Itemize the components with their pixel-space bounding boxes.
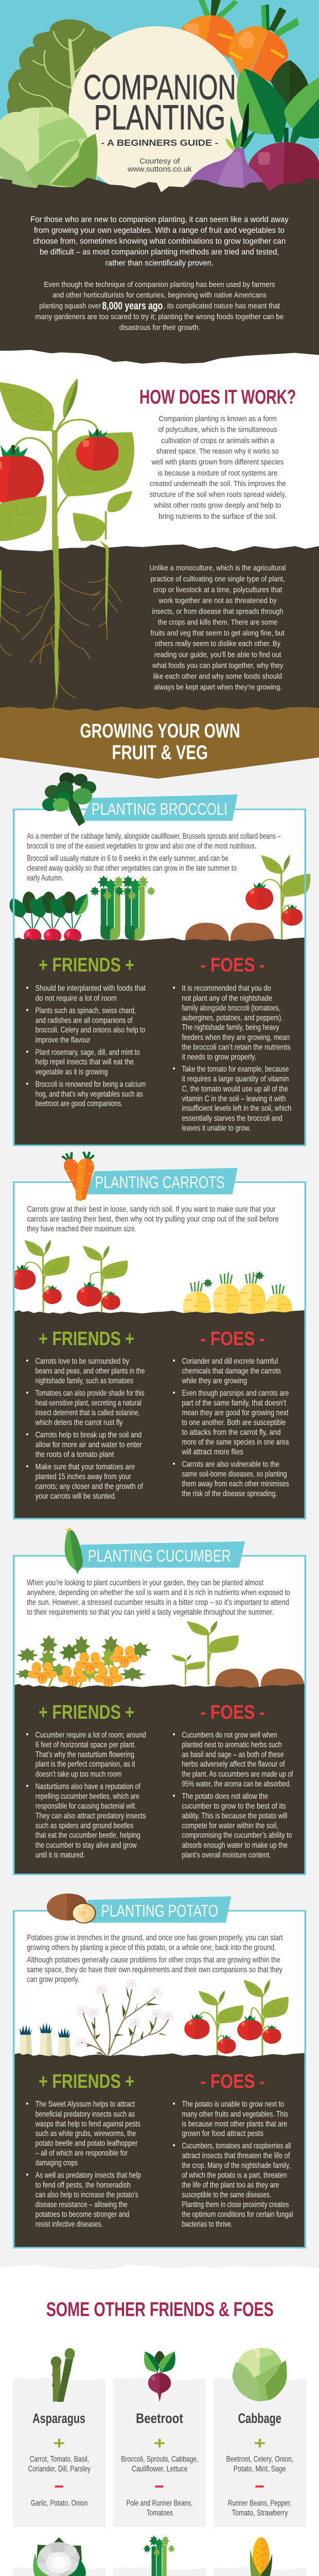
courtesy line: Courtesy of — [139, 157, 180, 165]
friends list: Cucumber require a lot of room; around — [36, 1730, 146, 1739]
foes list — [173, 1730, 293, 1859]
foes list: to attacks from the carrot fly, and — [182, 1427, 281, 1437]
friends list: potatoes to become stronger and — [36, 2209, 129, 2219]
icon: corn — [250, 2537, 272, 2576]
friends list: beans and peas, and other plants in the — [36, 1366, 145, 1376]
friends list: can also help to increase the potato’s — [36, 2190, 138, 2199]
history text: disastrous for their growth. — [119, 324, 200, 332]
illustration: sweet alyssum — [76, 1980, 173, 2056]
foes list: It is recommended that you do — [182, 984, 271, 993]
card: asparagus: Carrot, Tomato, Basil, — [30, 2454, 89, 2464]
banner: planting cucumber — [78, 1541, 245, 1568]
card: asparagus: Coriander, Dill, Parsley — [28, 2464, 91, 2473]
card: beetroot: – — [155, 2479, 164, 2493]
foes list: Carrots are also vulnerable to the — [182, 1459, 279, 1469]
text: polyculture: bring nutrients to the surface of the soil. — [158, 512, 277, 520]
icon: potato — [47, 1893, 96, 1924]
history text: 8,000 years ago — [102, 299, 163, 312]
friends list: the roots of a tomato plant — [36, 1449, 114, 1459]
friends list: Carrots love to be surrounded by — [36, 1356, 129, 1365]
card: asparagus: Asparagus — [32, 2411, 85, 2427]
title: PLANTING — [94, 98, 225, 137]
friends list: 6 feet of horizontal space per plant. — [36, 1740, 136, 1749]
friends list — [26, 1730, 146, 1859]
friends list: resist infective diseases. — [36, 2219, 103, 2229]
foes heading: - FOES - — [200, 1701, 265, 1723]
row: cards 1 — [13, 2348, 306, 2527]
friends list: doesn’t take up too much room — [36, 1769, 121, 1778]
foes list: compete for water within the soil, — [182, 1821, 278, 1830]
friends list: Carrots help to break up the soil and — [36, 1430, 141, 1439]
illustration: parsnips — [183, 1272, 292, 1326]
friends list: carrots; any closer and the growth of — [36, 1481, 143, 1490]
grey background — [0, 742, 319, 2269]
icon: carrots — [62, 1152, 94, 1201]
icon: front carrot — [228, 4, 299, 83]
card: cabbage — [214, 2348, 306, 2527]
banner: planting cucumber: PLANTING CUCUMBER — [88, 1547, 231, 1565]
friends heading: + FRIENDS + — [39, 1328, 134, 1349]
intro text: cucumber — [27, 1578, 290, 1617]
friends list: damaging crops — [36, 2158, 78, 2167]
foes list: grown for food attract pests — [182, 2128, 263, 2138]
illustration: nasturtiums — [14, 1635, 151, 1688]
card: asparagus: – — [55, 2479, 63, 2493]
text: monoculture — [150, 564, 286, 691]
foes list: leaves it unable to grow. — [182, 1123, 251, 1132]
foes heading: - FOES - — [200, 1328, 265, 1349]
foes list: while they are growing — [182, 1376, 247, 1385]
friends list: hog, and that’s why vegetables such as — [36, 1089, 143, 1098]
history text: planting squash over — [39, 302, 101, 310]
card: beetroot: Broccoli, Sprouts, Cabbage, — [121, 2454, 199, 2464]
friends list: such as white grubs, wireworms, the — [36, 2128, 136, 2138]
illustration: tomato plant — [245, 855, 310, 939]
friends heading: + FRIENDS + — [39, 954, 134, 976]
icon: celery — [143, 2535, 175, 2576]
intro text: carrots: they have reached their maximum size. — [27, 1224, 136, 1233]
icon: beetroot — [144, 2351, 175, 2402]
card: beetroot: Beetroot — [136, 2411, 183, 2427]
friends list: potato beetle and potato leafhopper — [36, 2139, 137, 2148]
friends list: your carrots will be stunted. — [36, 1491, 116, 1501]
icon: cabbage — [0, 107, 98, 192]
card: corn — [214, 2537, 306, 2576]
intro text: potato — [27, 1933, 283, 1984]
friends list: do not require a lot of room — [36, 993, 117, 1003]
friends list: disease resistance – allowing the — [36, 2199, 128, 2209]
friends list — [26, 984, 146, 1108]
friends list: heat-sensitive plant, secreting a natural — [36, 1398, 141, 1408]
panel: potato — [14, 1893, 305, 2248]
foes list — [173, 2099, 293, 2229]
card: asparagus: + — [54, 2433, 65, 2452]
illustration: tomato plants — [184, 1979, 289, 2056]
illustration: tomato seedlings and potatoes — [171, 1621, 305, 1688]
foes list: not plant any of the nightshade — [182, 993, 272, 1003]
friends list: nightshade family, such as tomatoes — [36, 1376, 133, 1385]
banner: planting carrots — [85, 1168, 238, 1194]
icon: broccoli — [42, 772, 96, 826]
friends list: As well as predatory insects that help — [36, 2170, 141, 2179]
intro text: broccoli — [27, 831, 281, 883]
friends list: Make sure that your tomatoes are — [36, 1462, 135, 1471]
subtitle: - A BEGINNERS GUIDE - — [101, 138, 218, 148]
card: cabbage: Potato, Mint, Sage — [234, 2464, 286, 2473]
card: cabbage: Tomato, Strawberry — [232, 2508, 288, 2517]
icon: red onion — [187, 103, 263, 192]
illustration: radishes — [10, 891, 88, 943]
illustration: celery — [90, 875, 156, 940]
card: beetroot: Tomatoes — [147, 2508, 173, 2517]
text: polyculture: Companion planting is known as a form — [158, 415, 277, 423]
card: beetroot — [113, 2351, 206, 2527]
friends list — [26, 1356, 145, 1501]
foes list: plant’s overall moisture content. — [182, 1850, 271, 1859]
foes list: will attract more flies — [182, 1447, 243, 1456]
intro text: broccoli: early Autumn. — [27, 873, 63, 883]
friends list: responsible for causing bacterial wilt. — [36, 1801, 137, 1810]
text: polyculture: is because a mixture of root systems are — [158, 469, 277, 477]
courtesy line: www.suttons.co.uk — [127, 165, 192, 174]
friends list: beneficial predatory insects such as — [36, 2109, 135, 2119]
friends list: Should be interplanted with foods that — [36, 984, 146, 993]
illustration: tomato plant with roots — [0, 378, 134, 551]
friends heading: + FRIENDS + — [39, 1701, 134, 1723]
banner: planting broccoli — [81, 794, 238, 821]
card: beetroot: + — [153, 2433, 166, 2452]
banner: planting potato: PLANTING POTATO — [101, 1902, 218, 1921]
friends list: improve the flavour — [36, 1035, 91, 1044]
icon: cauliflower — [33, 2537, 86, 2576]
friends list: broccoli. Celery and onions also help to — [36, 1025, 145, 1035]
intro text: carrots — [27, 1204, 279, 1233]
illustration: horseradish — [19, 2022, 71, 2066]
friends list: plant is the perfect companion, as it — [36, 1759, 135, 1769]
panel: broccoli — [10, 772, 310, 1145]
card: celery — [113, 2535, 206, 2576]
friends list: Plants such as spinach, swiss chard, — [36, 1006, 136, 1015]
foes list: it needs to grow properly. — [182, 1052, 256, 1061]
friends list: which deters the carrot rust fly — [35, 1417, 123, 1427]
foes list: The potato does not allow the — [182, 1791, 268, 1801]
hero illustration — [0, 0, 319, 206]
friends list: They can also attract predatory insects — [36, 1811, 146, 1820]
friends list: repelling cucumber beetles, which are — [36, 1791, 139, 1801]
icon: asparagus — [51, 2348, 75, 2402]
foes list — [173, 1356, 289, 1498]
friends list: planted 15 inches away from your — [36, 1471, 131, 1481]
card: cabbage: Cabbage — [238, 2411, 281, 2427]
courtesy line — [127, 157, 192, 174]
friends list: and radishes are all companions of — [36, 1015, 133, 1025]
cream circle — [69, 26, 244, 198]
card: cauliflower — [13, 2537, 105, 2576]
friends list: – all of which are responsible for — [36, 2148, 128, 2158]
friends list: until it is matured. — [36, 1850, 85, 1859]
card: asparagus — [13, 2348, 105, 2527]
soil band: intro — [0, 178, 319, 364]
history text: , its complicated nature has meant that — [164, 302, 280, 310]
soil band: how it works — [0, 545, 319, 724]
text: polyculture: of polyculture, which is the simultaneous — [158, 426, 277, 434]
illustration: tomato plants — [9, 1240, 128, 1312]
card: cabbage: – — [256, 2479, 263, 2493]
friends list: Broccoli is renowned for being a calcium — [36, 1079, 146, 1089]
foes heading: - FOES - — [200, 2071, 265, 2092]
icon: cabbage — [233, 2348, 287, 2401]
title — [83, 67, 236, 137]
friends list: insect deterrent that is called solanine, — [36, 1408, 140, 1417]
text: polyculture — [150, 415, 287, 520]
text: monoculture: the crops and kills them. There are some — [158, 618, 277, 626]
friends list: The Sweet Alyssum helps to attract — [36, 2099, 135, 2109]
friends list: the cucumber to stay alive and grow — [36, 1840, 137, 1850]
friends list: vegetable as it is growing — [36, 1067, 108, 1076]
intro text: potato: can grow properly. — [27, 1974, 79, 1984]
intro text — [30, 215, 289, 267]
illustration: potatoes — [185, 923, 274, 942]
friends heading: + FRIENDS + — [39, 2071, 134, 2092]
text: polyculture: cultivation of crops or animals within a — [161, 436, 275, 445]
foes list: the risk of the disease spreading. — [182, 1488, 277, 1498]
card: beetroot: Cauliflower, Lettuce — [132, 2464, 188, 2473]
foes heading: - FOES - — [200, 954, 265, 976]
icon: back carrot — [181, 0, 238, 59]
banner: planting potato — [85, 1896, 231, 1923]
card: cabbage: + — [254, 2433, 265, 2452]
friends list: That’s why the nasturtium flowering — [36, 1750, 134, 1759]
friends list: that eat the cucumber beetle, helping — [36, 1831, 140, 1840]
foes list: bacterias to thrive. — [182, 2219, 233, 2229]
history text — [35, 280, 283, 332]
foes list — [173, 984, 291, 1132]
friends list: Plant rosemary, sage, dill, and mint to — [36, 1047, 140, 1057]
friends list: Tomatoes can also provide shade for this — [36, 1388, 145, 1398]
row: cards 2 — [13, 2535, 306, 2576]
friends list: such as spiders and ground beetles — [36, 1821, 133, 1830]
text: monoculture: work together are not as threatened by — [158, 597, 277, 605]
friends list: wasps that help to fend against pests — [35, 2119, 140, 2128]
banner: planting carrots: PLANTING CARROTS — [95, 1173, 225, 1192]
card: asparagus: Garlic, Potato, Onion — [31, 2498, 87, 2507]
friends list: allow for more air and water to enter — [36, 1440, 142, 1449]
icon: beetroot with leaves — [237, 60, 319, 206]
friends list: beetroot are good companions. — [36, 1099, 123, 1108]
panel: cucumber — [14, 1528, 305, 1874]
friends list: Nasturtiums also have a reputation of — [36, 1782, 140, 1791]
banner: planting broccoli: PLANTING BROCCOLI — [92, 800, 227, 819]
panel: carrots — [9, 1152, 305, 1519]
card: beetroot: Pole and Runner Beans, — [127, 2498, 192, 2507]
friends list: to fend off pests, the horseradish — [36, 2180, 131, 2190]
friends list — [26, 2099, 141, 2229]
intro text: rather than scientifically proven. — [105, 259, 214, 267]
friends list: help repel insects that will eat the — [36, 1057, 134, 1066]
icon: dark lettuce — [7, 20, 126, 131]
text: polyculture: whilst other roots grow deeply and help to — [154, 501, 281, 510]
heading band: growing your own: FRUIT & VEG — [112, 742, 208, 764]
icon: cucumber — [64, 1528, 83, 1574]
heading band: growing your own — [0, 706, 319, 778]
